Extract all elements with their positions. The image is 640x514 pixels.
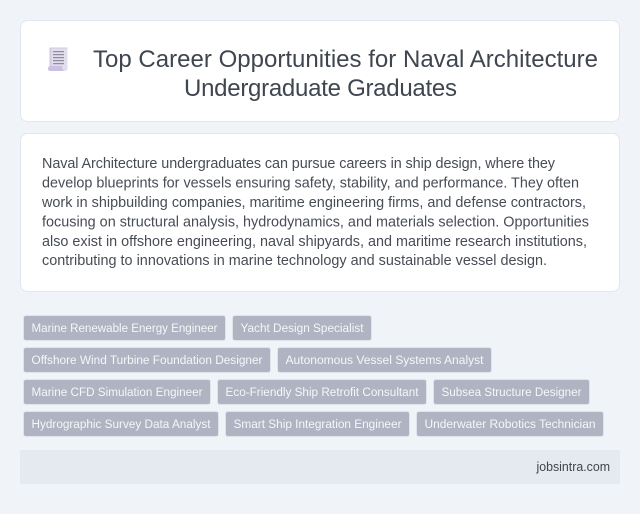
- tag: Yacht Design Specialist: Yacht Design Specialist: [240, 321, 364, 335]
- description text: [41, 156, 589, 269]
- description text: contributing to innovations in marine technology and sustainable vessel design.: [42, 253, 547, 269]
- title: [93, 46, 598, 102]
- tag: Smart Ship Integration Engineer: [226, 412, 410, 436]
- icon: document scroll: [48, 48, 68, 71]
- description text: develop blueprints for vessels ensuring safety, stability, and performance. They often: [42, 176, 579, 192]
- tag: Autonomous Vessel Systems Analyst: [278, 348, 492, 372]
- description text: also exist in offshore engineering, naval shipyards, and maritime research institutions,: [42, 234, 587, 250]
- tag: Smart Ship Integration Engineer: Smart Ship Integration Engineer: [234, 417, 402, 431]
- footer bar: [20, 450, 620, 484]
- tag: Underwater Robotics Technician: Underwater Robotics Technician: [424, 417, 596, 431]
- tag: Marine CFD Simulation Engineer: [24, 380, 210, 404]
- tag: Autonomous Vessel Systems Analyst: Autonomous Vessel Systems Analyst: [286, 353, 484, 367]
- description text: Naval Architecture undergraduates can pursue careers in ship design, where they: [42, 156, 556, 172]
- tag: Offshore Wind Turbine Foundation Designer: [24, 348, 270, 372]
- panel: title card: [20, 20, 620, 122]
- title: Top Career Opportunities for Naval Architecture: [93, 46, 598, 73]
- tag: Subsea Structure Designer: Subsea Structure Designer: [442, 385, 582, 399]
- title: Undergraduate Graduates: [184, 75, 457, 102]
- footer source text: jobsintra.com: [536, 459, 610, 474]
- description text: focusing on structural analysis, hydrodynamics, and materials selection. Opportunities: [42, 214, 589, 230]
- tag: Subsea Structure Designer: [434, 380, 590, 404]
- description text: work in shipbuilding companies, maritime engineering firms, and defense contractors,: [41, 195, 586, 211]
- tag: Offshore Wind Turbine Foundation Designer: Offshore Wind Turbine Foundation Designer: [32, 353, 262, 367]
- tag: Eco-Friendly Ship Retrofit Consultant: Eco-Friendly Ship Retrofit Consultant: [226, 385, 419, 399]
- tag: Marine Renewable Energy Engineer: [24, 316, 226, 340]
- tag: Hydrographic Survey Data Analyst: Hydrographic Survey Data Analyst: [32, 417, 211, 431]
- tag: Hydrographic Survey Data Analyst: [24, 412, 218, 436]
- tag list: [24, 316, 604, 436]
- tag: Marine Renewable Energy Engineer: Marine Renewable Energy Engineer: [32, 321, 218, 335]
- tag: Marine CFD Simulation Engineer: Marine CFD Simulation Engineer: [32, 385, 202, 399]
- tag: Underwater Robotics Technician: [416, 412, 604, 436]
- panel: description: [20, 134, 620, 292]
- tag: Eco-Friendly Ship Retrofit Consultant: [218, 380, 426, 404]
- tag: Yacht Design Specialist: [232, 316, 372, 340]
